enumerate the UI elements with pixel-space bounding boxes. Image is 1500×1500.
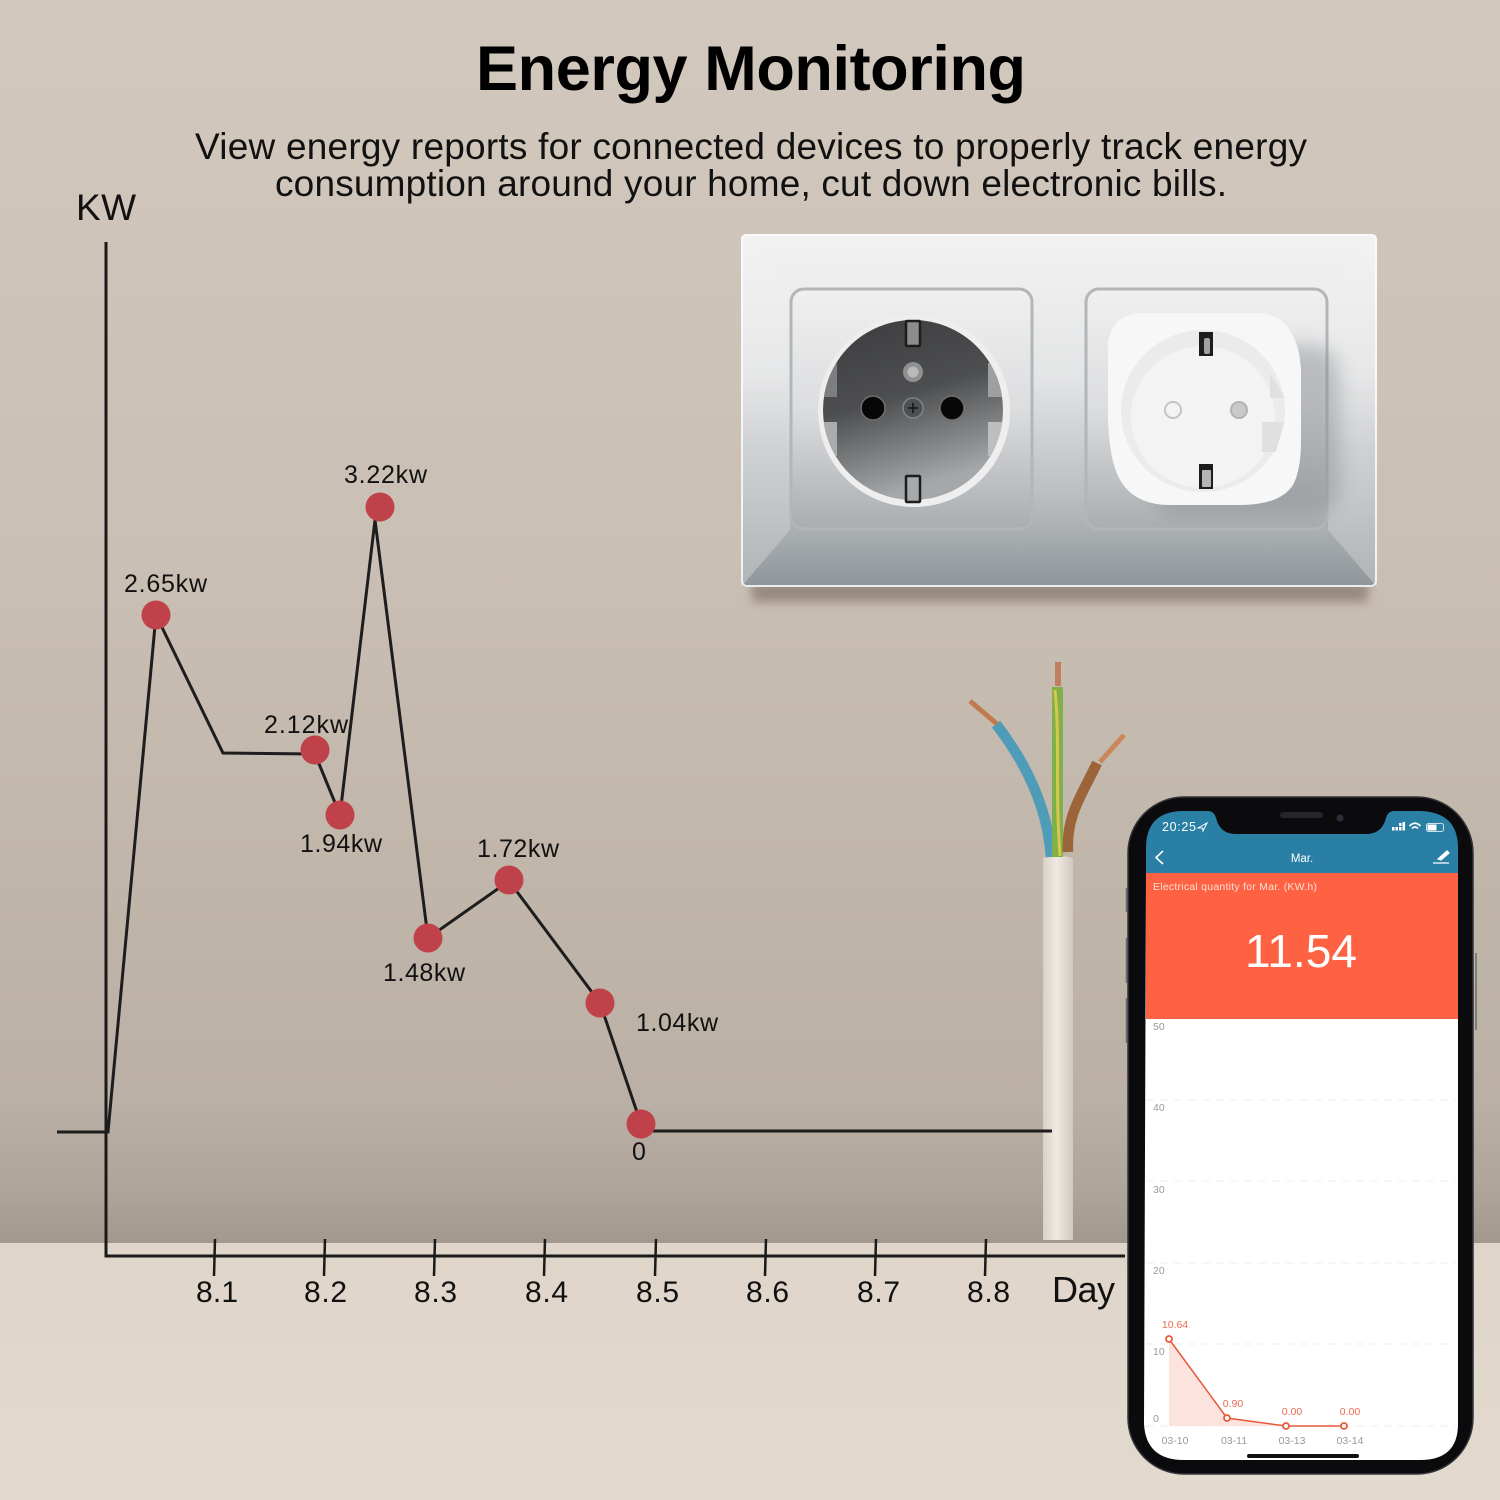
x axis ticks — [214, 1239, 986, 1276]
data labels: 1.04kw — [636, 1009, 719, 1037]
value labels: 0.90 — [1223, 1398, 1243, 1410]
panel: wall socket plate — [741, 234, 1377, 602]
date labels — [1162, 1435, 1364, 1447]
line chart — [57, 187, 1125, 1310]
notch camera — [1336, 814, 1344, 822]
x axis tick labels: 8.7 — [857, 1276, 900, 1309]
value labels — [1162, 1319, 1360, 1418]
axes — [106, 242, 1125, 1256]
plate body — [741, 234, 1377, 587]
gridlines — [1146, 1100, 1456, 1426]
shutter screw — [903, 362, 923, 382]
x axis tick labels: 8.4 — [525, 1276, 568, 1309]
app header — [1146, 811, 1458, 873]
data labels: 2.65kw — [124, 570, 208, 598]
white cable — [970, 662, 1124, 1240]
green wire copper — [1055, 662, 1061, 686]
x axis tick labels: 8.5 — [636, 1276, 679, 1309]
y axis labels: 30 — [1153, 1184, 1165, 1196]
date labels: 03-13 — [1279, 1435, 1306, 1447]
x axis tick labels: 8.1 — [196, 1276, 238, 1309]
x axis label: Day — [1052, 1269, 1115, 1310]
date labels: 03-14 — [1337, 1435, 1364, 1447]
data labels: 1.94kw — [300, 830, 383, 858]
smart plug body — [1108, 313, 1301, 505]
header title: Mar. — [1291, 853, 1313, 865]
description text — [195, 126, 1308, 204]
blue wire copper — [970, 701, 997, 724]
earth clip bottom — [906, 476, 920, 502]
y axis labels: 10 — [1153, 1346, 1165, 1358]
brown wire — [1068, 763, 1097, 852]
total value: 11.54 — [1245, 925, 1357, 977]
y axis labels: 20 — [1153, 1265, 1165, 1277]
screen body — [1144, 873, 1458, 1460]
smart plug side notches — [1262, 373, 1285, 452]
x axis tick labels: 8.2 — [304, 1276, 347, 1309]
orange summary panel — [1146, 873, 1458, 1019]
plug clip top — [1199, 332, 1213, 356]
plug clip bottom — [1199, 464, 1213, 489]
x axis tick labels: 8.8 — [967, 1276, 1010, 1309]
date labels: 03-11 — [1221, 1435, 1247, 1447]
panel caption: Electrical quantity for Mar. (KW.h) — [1153, 881, 1317, 893]
cable sheath — [1043, 856, 1073, 1240]
y axis labels: 0 — [1153, 1413, 1159, 1425]
data points — [142, 492, 656, 1138]
pin hole left — [861, 396, 885, 420]
socket side notches — [820, 363, 1005, 456]
x axis tick labels: 8.6 — [746, 1276, 789, 1309]
socket rim — [818, 315, 1010, 507]
data line — [1169, 1339, 1344, 1426]
back chevron — [1156, 851, 1163, 864]
location arrow — [1198, 823, 1207, 831]
data labels: 2.12kw — [264, 711, 349, 739]
earth clip top — [906, 321, 920, 346]
signal icon — [1392, 822, 1405, 830]
value labels: 0.00 — [1340, 1406, 1360, 1418]
notch speaker — [1280, 812, 1323, 818]
data labels: 1.72kw — [477, 835, 560, 863]
data labels: 1.48kw — [383, 959, 466, 987]
plug hole right — [1231, 402, 1247, 418]
floor surface — [0, 1243, 1500, 1500]
edit icon — [1433, 851, 1449, 863]
battery icon — [1426, 824, 1444, 832]
y axis label: KW — [76, 187, 136, 228]
blue wire — [996, 724, 1051, 857]
data labels: 0 — [632, 1138, 646, 1166]
y axis labels: 40 — [1153, 1102, 1165, 1114]
home indicator — [1247, 1454, 1359, 1458]
left socket frame — [791, 289, 1032, 529]
status time: 20:25 — [1162, 820, 1196, 834]
smart plug well — [1121, 330, 1285, 492]
x axis tick labels — [196, 1276, 1010, 1309]
x axis tick labels: 8.3 — [414, 1276, 457, 1309]
center screw — [903, 398, 923, 418]
brown wire copper — [1100, 735, 1124, 762]
smartphone — [1126, 797, 1476, 1474]
pin hole right — [940, 396, 964, 420]
plate side bevels — [741, 234, 1377, 587]
wifi icon — [1410, 823, 1420, 828]
smart plug shadow — [1150, 345, 1340, 515]
data labels — [124, 461, 719, 1166]
description text: consumption around your home, cut down electronic bills. — [275, 163, 1227, 204]
phone body — [1128, 797, 1473, 1474]
value labels: 0.00 — [1282, 1406, 1302, 1418]
data line — [57, 520, 1052, 1132]
area fill — [1169, 1339, 1286, 1426]
y axis labels: 50 — [1153, 1021, 1165, 1033]
right socket frame — [1086, 289, 1340, 529]
y axis labels — [1153, 1021, 1165, 1425]
title: Energy Monitoring — [476, 34, 1026, 104]
side buttons — [1126, 888, 1476, 1043]
green-yellow wire — [1052, 687, 1063, 857]
plug hole left — [1165, 402, 1181, 418]
data markers — [1166, 1336, 1347, 1429]
description text: View energy reports for connected devices to properly track energy — [195, 126, 1308, 167]
date labels: 03-10 — [1162, 1435, 1189, 1447]
data labels: 3.22kw — [344, 461, 428, 489]
value labels: 10.64 — [1162, 1319, 1188, 1331]
plate shadow — [752, 582, 1368, 602]
phone chart — [1146, 1021, 1456, 1447]
socket well — [823, 320, 1003, 500]
